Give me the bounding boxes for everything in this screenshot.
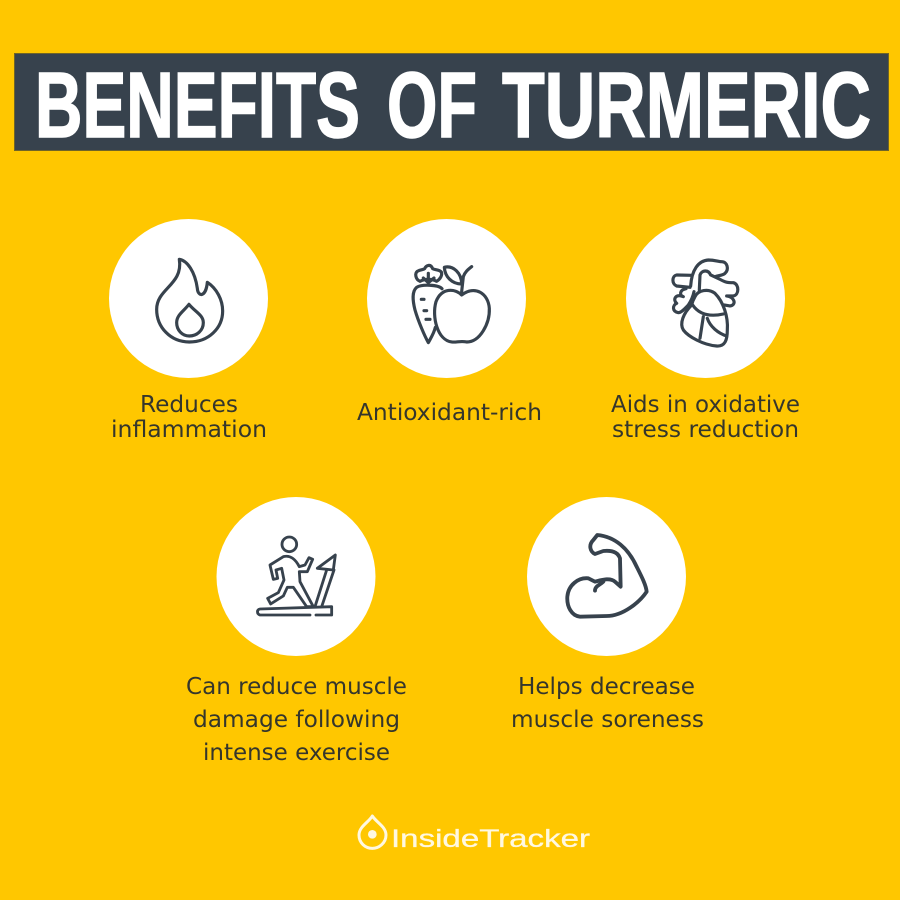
logo wordmark: InsideTracker xyxy=(391,825,590,853)
label xyxy=(611,391,800,443)
title: OF xyxy=(387,53,477,157)
panel: reduces inflammation xyxy=(109,219,268,443)
label: stress reduction xyxy=(612,416,799,443)
icon: flame xyxy=(157,259,223,342)
panel: muscle soreness xyxy=(511,497,704,733)
title: BENEFITS xyxy=(35,53,360,157)
label: Helps decrease xyxy=(518,673,695,700)
title xyxy=(35,53,871,157)
label: inflammation xyxy=(111,416,267,443)
panel: reduce muscle damage xyxy=(186,497,407,766)
label: Reduces xyxy=(140,391,238,418)
icon: flexed arm xyxy=(567,535,647,617)
label: Antioxidant-rich xyxy=(357,399,542,426)
label: intense exercise xyxy=(203,739,390,766)
logo: InsideTracker xyxy=(359,816,590,853)
panel: antioxidant-rich xyxy=(357,219,542,426)
panel: oxidative stress reduction xyxy=(611,219,800,443)
icon: runner on treadmill xyxy=(257,537,335,615)
title banner xyxy=(14,53,888,157)
label: damage following xyxy=(193,706,400,733)
icon: anatomical heart xyxy=(673,260,738,346)
label: Can reduce muscle xyxy=(186,673,407,700)
label: Aids in oxidative xyxy=(611,391,800,418)
icon: logo drop xyxy=(359,816,386,848)
label: muscle soreness xyxy=(511,706,704,733)
icon: carrot and apple xyxy=(413,265,489,343)
label xyxy=(186,673,407,766)
label xyxy=(511,673,704,733)
label xyxy=(111,391,267,443)
